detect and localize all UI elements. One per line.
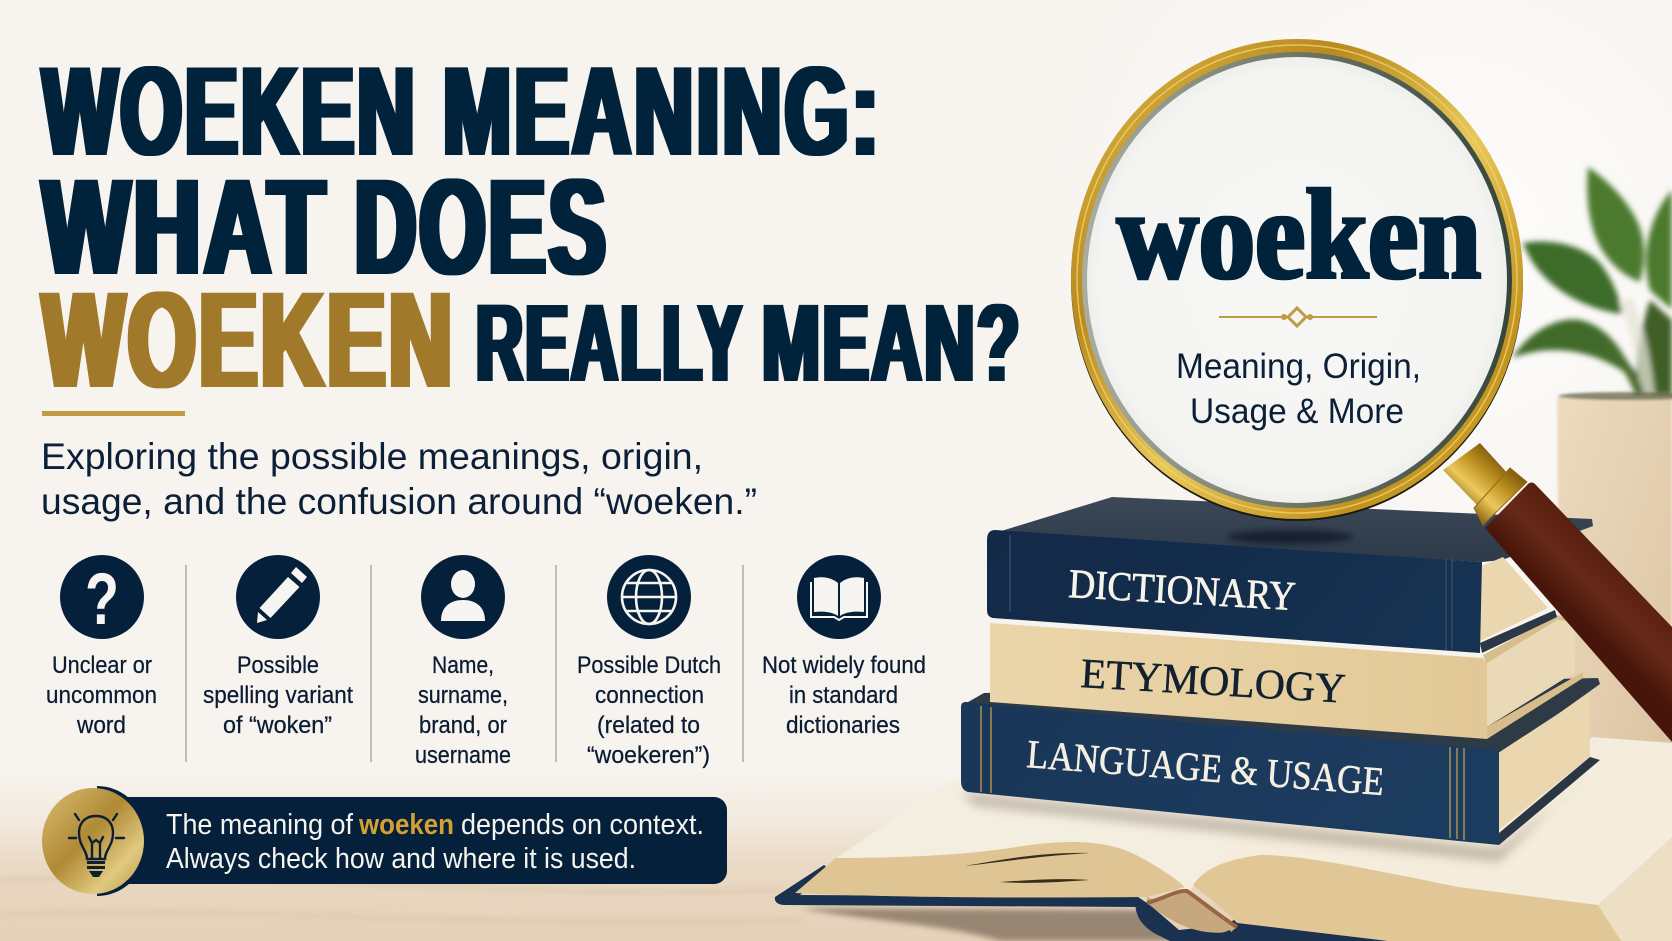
- shadow under book: [800, 908, 1180, 941]
- title: DOES: [355, 151, 609, 304]
- label: dictionaries: [762, 652, 926, 739]
- label: spelling: spelling variant: [203, 682, 353, 709]
- book cover: [775, 865, 1388, 941]
- title: MEANING:: [443, 40, 882, 182]
- callout text: The meaning of: [166, 809, 354, 841]
- label: dictionaries: Not widely found: [762, 652, 926, 679]
- lens word: woeken: [1117, 163, 1481, 307]
- magnifying glass: [1071, 39, 1672, 742]
- gutter: [1147, 890, 1237, 933]
- plant pot: [1557, 392, 1672, 745]
- label: Dutch: Possible Dutch: [577, 652, 721, 679]
- page block side: [1598, 837, 1672, 941]
- label: name: username: [415, 742, 511, 769]
- icon: pencil: [236, 555, 320, 639]
- gold rule: [42, 411, 185, 416]
- icon: open book: [797, 555, 881, 639]
- right page edges: [1193, 855, 1621, 941]
- title: REALLY: [476, 282, 744, 405]
- title: WOEKEN: [42, 264, 456, 417]
- lens rim: [1071, 39, 1523, 519]
- feature: name or brand: [415, 555, 511, 769]
- lens subtitle: Meaning, Origin,: [1176, 347, 1421, 386]
- book: etymology: [990, 615, 1583, 739]
- lens subtitle: Usage & More: [1190, 392, 1404, 431]
- feature: spelling variant: [203, 555, 353, 739]
- label: spelling: Possible: [237, 652, 319, 679]
- icon: question mark: ?: [85, 559, 119, 640]
- callout text: depends on context.: [461, 809, 704, 841]
- icon: light bulb coin: [42, 788, 144, 894]
- feature: not in dictionaries: [762, 555, 926, 739]
- coin backing: [97, 786, 148, 896]
- label: spelling: [203, 652, 353, 739]
- label: name: surname,: [418, 682, 508, 709]
- plant: [1512, 167, 1672, 395]
- subtitle: usage, and the confusion around “woeken.”: [41, 481, 757, 522]
- label: unclear: word: [76, 712, 126, 739]
- callout text: woeken: [358, 809, 454, 841]
- callout: [42, 786, 727, 896]
- label: Dutch: connection: [595, 682, 704, 709]
- dividers: [186, 565, 743, 762]
- left page: [836, 780, 1254, 890]
- lens subtitle: [1176, 347, 1421, 431]
- label: Dutch: (related to: [597, 712, 700, 739]
- label: Dutch: “woekeren”): [587, 742, 710, 769]
- book stack: [961, 497, 1600, 862]
- feature: unclear word: [46, 555, 157, 739]
- shadow under stack: [961, 770, 1600, 862]
- handle: [1485, 482, 1672, 742]
- book: dictionary: DICTIONARY: [1067, 560, 1297, 619]
- subtitle: [41, 436, 757, 522]
- label: unclear: Unclear or: [52, 652, 152, 679]
- feature: Dutch connection: [577, 555, 721, 769]
- subtitle: Exploring the possible meanings, origin,: [41, 436, 703, 477]
- icon: person: [421, 555, 505, 639]
- label: name: Name,: [432, 652, 494, 679]
- label: dictionaries: in standard: [789, 682, 898, 709]
- right page: [1193, 737, 1672, 905]
- icon: globe: [607, 555, 691, 639]
- label: spelling: of “woken”: [223, 712, 332, 739]
- icon: question mark: [60, 555, 144, 640]
- title: WOEKEN: [42, 40, 418, 182]
- open book: [775, 737, 1672, 941]
- lens glass: [1087, 57, 1507, 503]
- left page edges: [795, 842, 1185, 898]
- title: WHAT: [42, 151, 328, 304]
- ornament: [1219, 308, 1377, 326]
- title: [42, 40, 1022, 417]
- label: unclear: [46, 652, 157, 739]
- book: dictionary: [987, 497, 1593, 653]
- label: Dutch: [577, 652, 721, 769]
- ferrule: [1443, 443, 1527, 525]
- book: etymology: ETYMOLOGY: [1079, 651, 1347, 713]
- callout text: Always check how and where it is used.: [166, 843, 636, 875]
- label: unclear: uncommon: [46, 682, 157, 709]
- book: language and usage: [961, 678, 1600, 845]
- label: name: [415, 652, 511, 769]
- book: language and usage: LANGUAGE & USAGE: [1025, 731, 1386, 804]
- callout text: [166, 809, 704, 875]
- lens shadow: [1071, 41, 1523, 521]
- title: MEAN?: [762, 282, 1022, 405]
- label: name: brand, or: [419, 712, 507, 739]
- callout bar: [115, 797, 727, 884]
- label: dictionaries: dictionaries: [786, 712, 900, 739]
